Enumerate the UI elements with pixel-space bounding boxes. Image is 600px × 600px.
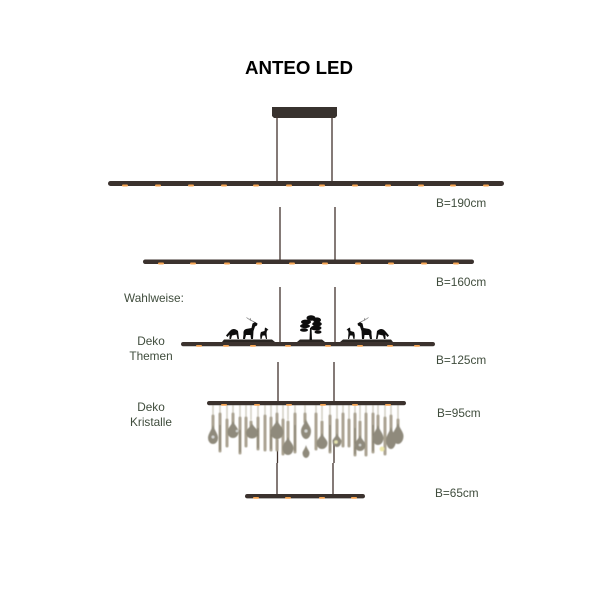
label: Deko Themen: Deko [137,334,165,348]
width label 95cm: B=95cm [437,406,481,420]
lamp: 125cm with theme decoration [181,287,435,347]
ceiling canopy [272,107,337,118]
crystal lamp LEDs [221,404,391,406]
lamp: 190cm with ceiling canopy [108,107,504,186]
light bar [108,181,504,186]
width label 160cm: B=160cm [436,275,486,289]
lamp: 65cm [245,463,365,499]
label: Deko Themen: Themen [129,349,173,363]
decoration: deer group right [340,318,393,342]
lower rods behind crystals [278,440,334,463]
label: Deko Kristalle: Deko [137,400,165,414]
lamp: 95cm with crystals [207,362,406,463]
title: ANTEO LED [245,57,353,78]
decoration: tree [297,315,325,342]
width label 190cm: B=190cm [436,196,486,210]
width label 65cm: B=65cm [435,486,479,500]
suspension rods [277,116,332,182]
rods above crystal bar [278,362,334,402]
label: Deko Kristalle: Kristalle [130,415,172,429]
optional label: Wahlweise: [124,291,184,305]
LED lights [122,184,489,186]
decoration: deer group left [222,318,275,342]
lamp: 160cm [143,207,474,264]
crystal lamp bar [207,401,406,405]
crystal strands [208,405,404,458]
width label 125cm: B=125cm [436,353,486,367]
